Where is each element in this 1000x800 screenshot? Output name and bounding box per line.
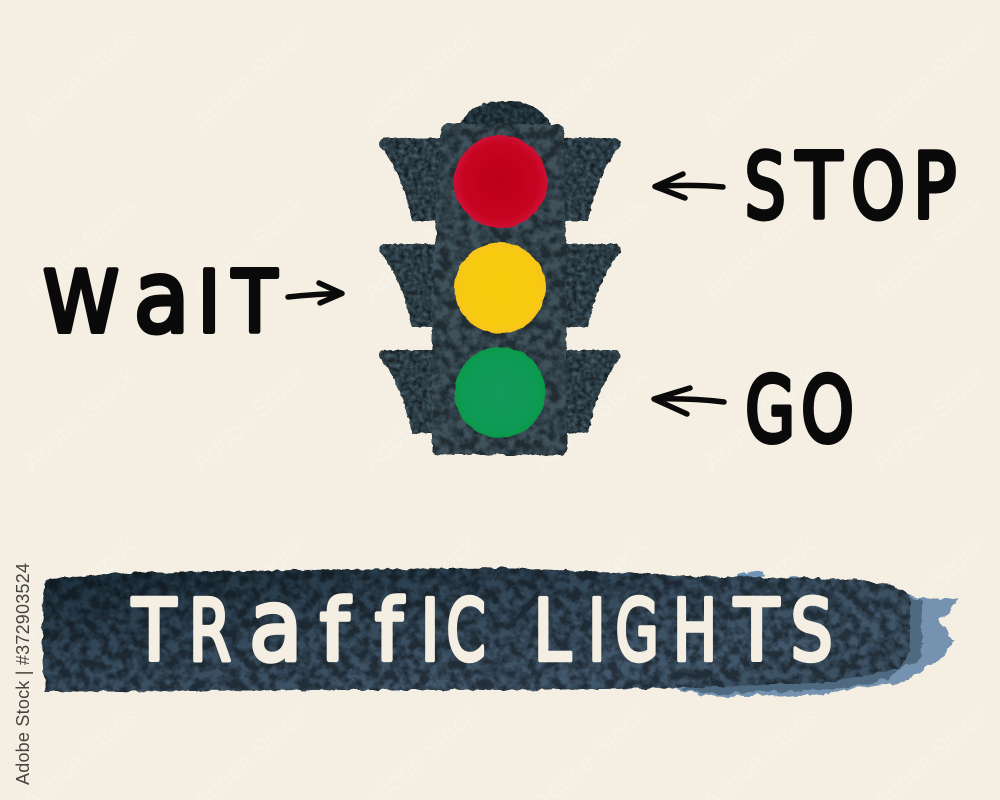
body bbox=[432, 124, 567, 455]
label: stop: T bbox=[795, 134, 843, 240]
housing bbox=[380, 101, 620, 455]
traffic light bbox=[380, 101, 620, 455]
label: wait: a bbox=[134, 238, 190, 356]
label: wait: T bbox=[232, 254, 278, 352]
yellow lamp bbox=[454, 242, 546, 334]
banner title: T bbox=[734, 582, 780, 681]
brush banner bbox=[42, 567, 958, 697]
label: stop: S bbox=[745, 134, 786, 240]
brush tail bbox=[676, 572, 958, 697]
stock id side text: Adobe Stock | #372903524 bbox=[13, 563, 33, 785]
green lamp bbox=[454, 347, 546, 438]
banner title: f bbox=[320, 582, 351, 681]
banner title: G bbox=[616, 582, 659, 681]
side visors bbox=[380, 138, 620, 433]
brush stroke bbox=[42, 568, 910, 692]
banner title: I bbox=[588, 582, 606, 681]
label: stop: O bbox=[851, 134, 905, 240]
banner title: L bbox=[533, 582, 571, 681]
label: wait: I bbox=[198, 254, 220, 352]
label: stop: P bbox=[913, 134, 956, 240]
red lamp bbox=[454, 135, 547, 228]
banner title: a bbox=[249, 567, 302, 684]
arrow: wait bbox=[288, 283, 342, 303]
banner title: C bbox=[446, 582, 486, 681]
arrow: go bbox=[654, 388, 724, 414]
banner title: I bbox=[421, 582, 439, 681]
label: go: O bbox=[801, 358, 854, 463]
arrow: stop bbox=[655, 174, 723, 198]
banner title: R bbox=[189, 582, 231, 681]
banner title: S bbox=[791, 582, 833, 681]
banner title: T bbox=[132, 582, 177, 681]
banner title: f bbox=[375, 582, 404, 681]
hood bbox=[459, 101, 552, 128]
label: wait: W bbox=[43, 254, 119, 352]
banner title: H bbox=[673, 582, 717, 681]
label: go: G bbox=[745, 358, 795, 463]
